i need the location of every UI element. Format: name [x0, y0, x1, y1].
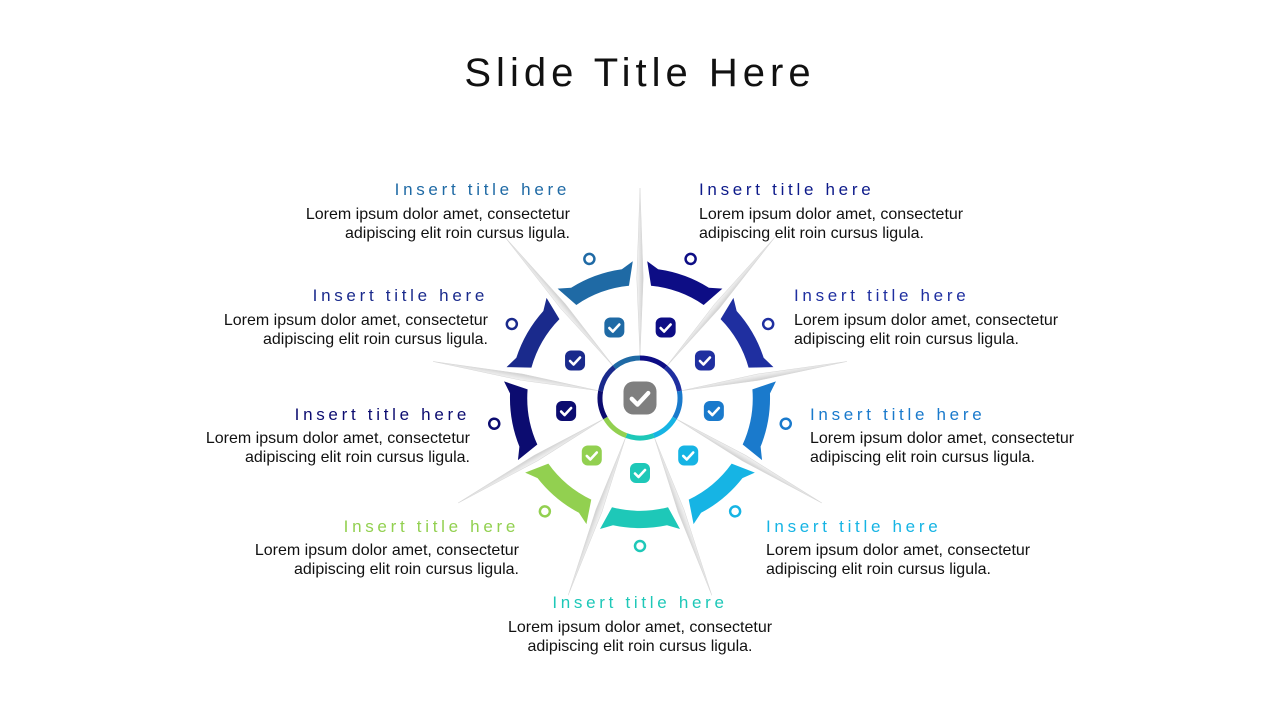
- segments: [504, 261, 776, 529]
- text: left 4: adipiscing elit roin cursus ligula.: [294, 561, 519, 578]
- outer dots: [488, 253, 792, 551]
- text: left 4: Lorem ipsum dolor amet, consectetur: [255, 542, 520, 559]
- text: bottom: Lorem ipsum dolor amet, consectetur: [508, 619, 773, 636]
- text: bottom: Insert title here: [552, 593, 728, 612]
- text: top right: Lorem ipsum dolor amet, consectetur: [699, 206, 964, 223]
- center ring: [584, 342, 696, 454]
- text: left 3: Insert title here: [295, 405, 470, 424]
- text: left 4: Insert title here: [344, 517, 519, 536]
- diagram: wheel: [433, 188, 847, 596]
- text: right 1: [794, 286, 1059, 348]
- text: top left: Lorem ipsum dolor amet, consectetur: [306, 206, 571, 223]
- text: top left: adipiscing elit roin cursus ligula.: [345, 225, 570, 242]
- text: right 2: adipiscing elit roin cursus ligula.: [810, 449, 1035, 466]
- text: right 3: [766, 517, 1031, 578]
- text: left 2: adipiscing elit roin cursus ligula.: [263, 331, 488, 348]
- text: left 4: [255, 517, 520, 578]
- text: left 3: [206, 405, 471, 466]
- text: right 2: Lorem ipsum dolor amet, consectetur: [810, 430, 1075, 447]
- icon: center check: [624, 382, 656, 414]
- text: right 3: Insert title here: [766, 517, 941, 536]
- text: right 1: Lorem ipsum dolor amet, consectetur: [794, 312, 1059, 329]
- spikes: [433, 188, 847, 596]
- text: left 2: Lorem ipsum dolor amet, consectetur: [224, 312, 489, 329]
- check icons: [556, 318, 724, 483]
- text: right 3: Lorem ipsum dolor amet, consectetur: [766, 542, 1031, 559]
- text: top left: [306, 180, 571, 242]
- text: right 2: Insert title here: [810, 405, 985, 424]
- text: bottom: [508, 593, 773, 655]
- text: right 1: Insert title here: [794, 286, 969, 305]
- text: right 1: adipiscing elit roin cursus ligula.: [794, 331, 1019, 348]
- text: top right: Insert title here: [699, 180, 874, 199]
- text: left 3: Lorem ipsum dolor amet, consectetur: [206, 430, 471, 447]
- text: left 2: [224, 286, 489, 348]
- text: top right: [699, 180, 964, 242]
- text: left 2: Insert title here: [313, 286, 488, 305]
- text: right 3: adipiscing elit roin cursus ligula.: [766, 561, 991, 578]
- text: right 2: [810, 405, 1075, 466]
- title: Slide Title Here: [464, 51, 816, 95]
- text: top left: Insert title here: [395, 180, 570, 199]
- text: bottom: adipiscing elit roin cursus ligula.: [528, 638, 752, 655]
- text: left 3: adipiscing elit roin cursus ligula.: [245, 449, 470, 466]
- text: top right: adipiscing elit roin cursus ligula.: [699, 225, 924, 242]
